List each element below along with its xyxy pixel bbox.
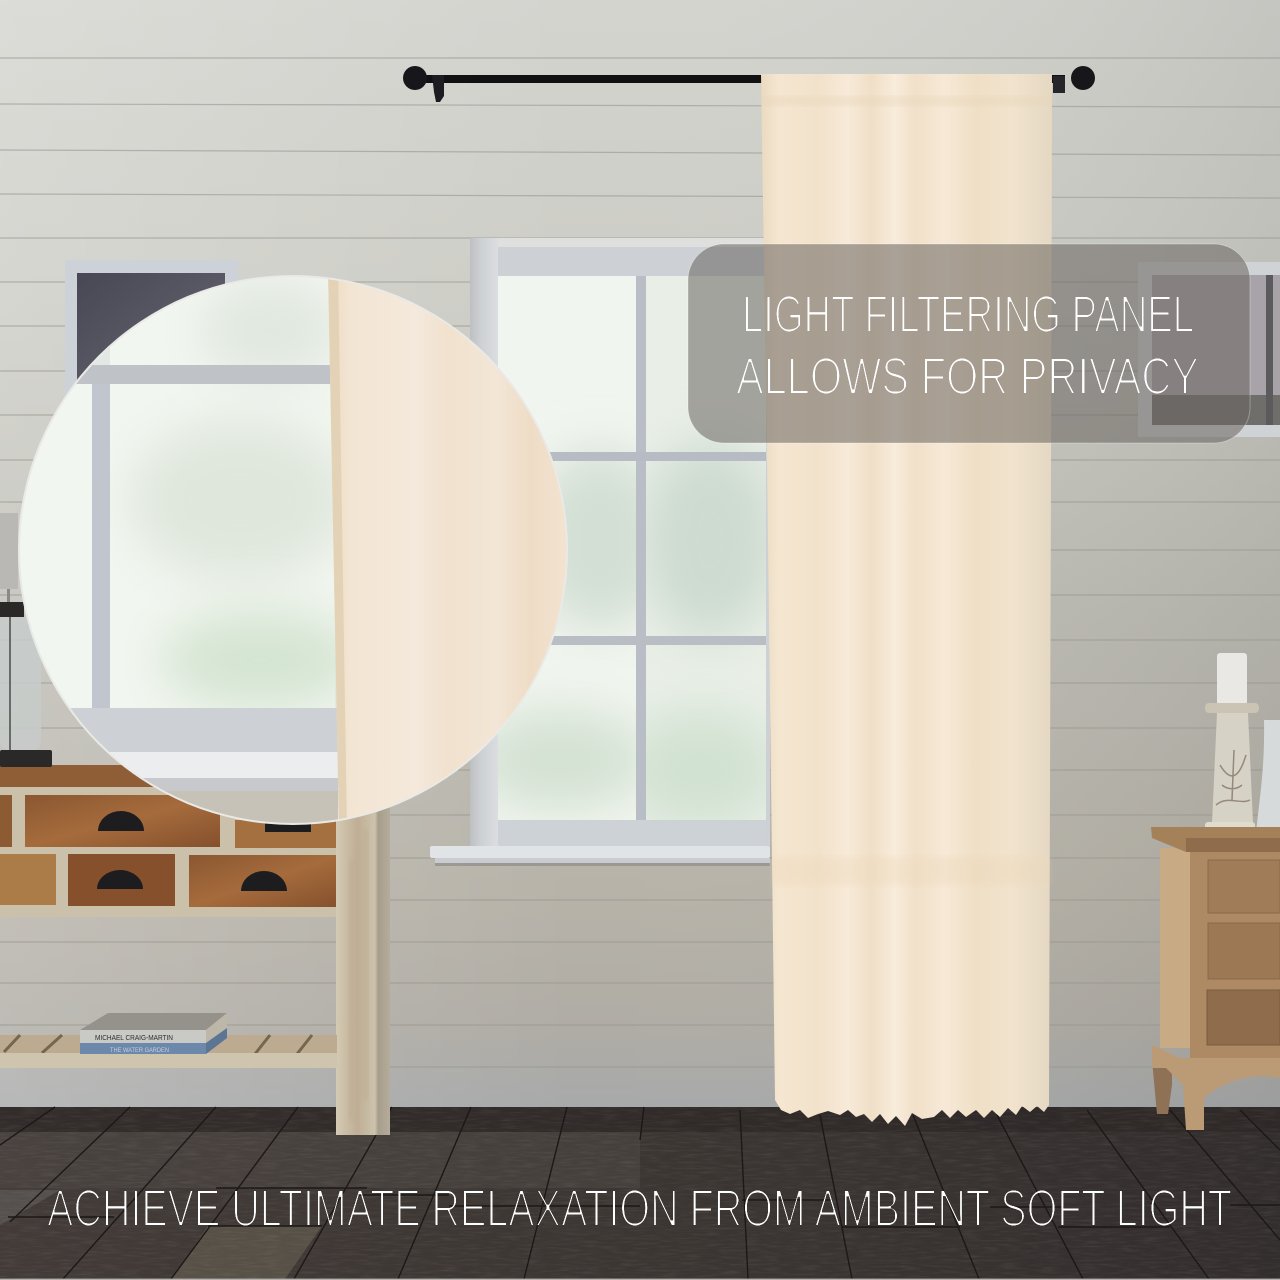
cup handles [97,811,311,891]
picture frame left [65,260,238,395]
chest of drawers [1151,827,1280,1130]
lower shelf [0,1035,337,1053]
console table [0,765,390,1135]
candle holder [1205,653,1259,833]
table leg [336,770,390,1135]
magnified window glass [0,270,335,710]
window sill [430,846,770,858]
curtain panel [761,74,1052,1126]
vase [1256,720,1280,836]
drawers [0,795,340,907]
window [430,238,780,866]
magnified detail circle [0,270,575,831]
picture frame right [1138,262,1280,437]
window glass right [646,276,766,820]
window glass left [498,276,636,820]
magnified window mullions [92,365,110,708]
magnified window sill [70,708,338,752]
floor [0,1107,1280,1280]
magnified curtain [328,270,575,830]
window mullions [636,276,646,820]
lamp [0,513,52,767]
callout heading [736,286,1199,406]
books: MICHAEL CRAIG-MARTIN [95,1033,173,1042]
translucent callout panel [688,244,1250,443]
floor plank seams [0,1107,1280,1279]
books: THE WATER GARDEN [110,1048,169,1054]
floor plank tones [0,1107,1280,1279]
curtain rod [403,66,1095,102]
books [80,1013,227,1054]
chest back leg [1152,1060,1172,1114]
